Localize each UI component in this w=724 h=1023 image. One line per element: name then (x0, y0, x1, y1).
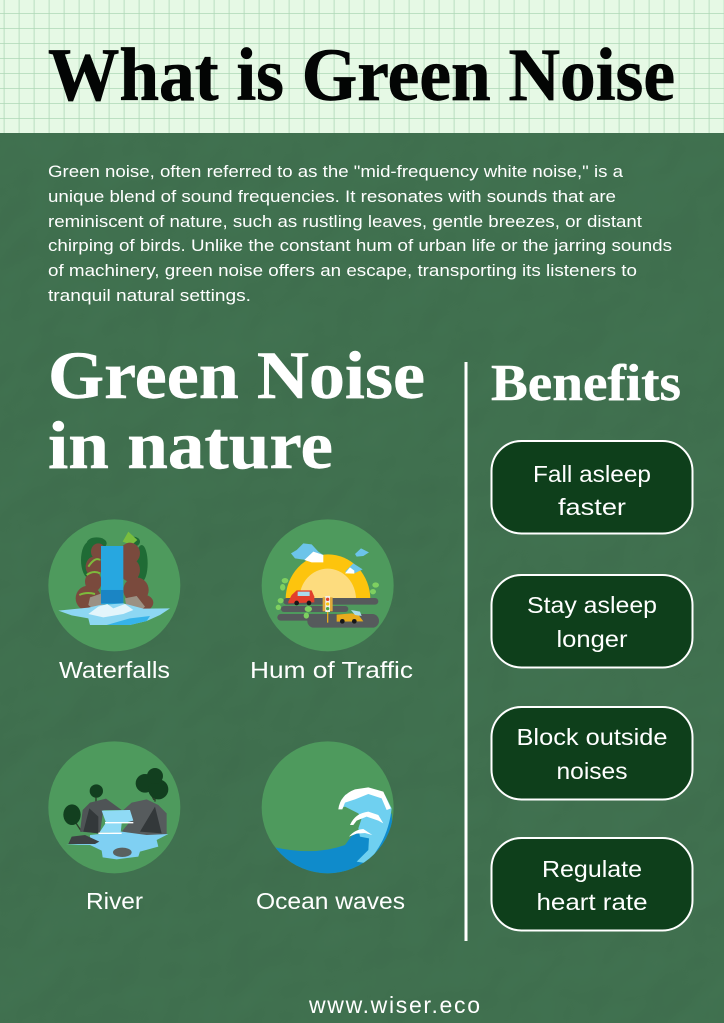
text block: introduction: chirping of birds. Unlike the constant hum of urban life or the jarring sounds (48, 236, 672, 255)
benefit: Fall asleep faster: Fall asleep (533, 461, 651, 487)
benefit: Block outside noises: noises (556, 758, 628, 784)
label: Hum of Traffic: Hum of Traffic (250, 657, 413, 683)
panel: title header with grid paper (0, 0, 724, 133)
icon: hum of traffic (262, 519, 394, 651)
benefit: Stay asleep longer (492, 575, 692, 668)
text block: introduction: tranquil natural settings. (48, 286, 251, 305)
benefit: Block outside noises: Block outside (516, 724, 668, 750)
label: Ocean waves: Ocean waves (256, 888, 405, 914)
benefit: Fall asleep faster (492, 441, 692, 534)
benefit: Regulate heart rate: heart rate (536, 889, 648, 915)
benefit: Fall asleep faster: faster (558, 494, 626, 520)
text block: introduction: of machinery, green noise offers an escape, transporting its listeners to (48, 261, 637, 280)
icon: waterfall (48, 519, 180, 651)
text block: introduction (48, 162, 672, 305)
heading: Green Noise in nature (48, 337, 425, 483)
text block: introduction: Green noise, often referred to as the "mid-frequency white noise," is a (48, 162, 624, 181)
divider line (464, 362, 468, 941)
heading: Benefits: Benefits (491, 355, 681, 412)
heading: Green Noise in nature: Green Noise (48, 337, 425, 413)
icon: ocean wave (262, 741, 395, 877)
footer: website: www.wiser.eco (308, 992, 480, 1018)
label: Waterfalls: Waterfalls (59, 657, 170, 683)
text block: introduction: reminiscent of nature, such as rustling leaves, gentle breezes, or distant (48, 212, 642, 231)
benefit: Regulate heart rate: Regulate (542, 856, 642, 882)
benefit: Block outside noises (492, 707, 692, 800)
title: What is Green Noise (48, 34, 675, 117)
label: River: River (86, 888, 143, 914)
icon: river (48, 741, 180, 873)
text block: introduction: unique blend of sound frequencies. It resonates with sounds that are (48, 187, 616, 206)
benefit: Stay asleep longer: Stay asleep (527, 592, 657, 618)
benefit: Regulate heart rate (492, 838, 692, 930)
benefit: Stay asleep longer: longer (556, 626, 628, 652)
heading: Green Noise in nature: in nature (48, 407, 333, 483)
